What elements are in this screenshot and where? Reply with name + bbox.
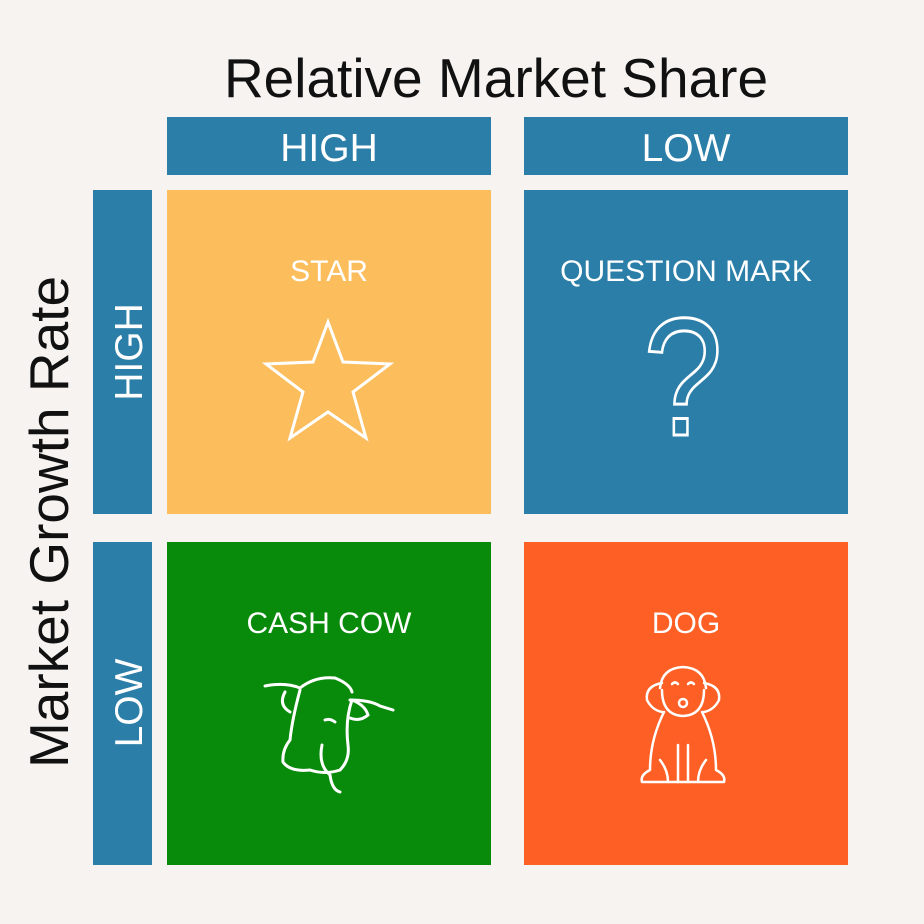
side label: HIGH: HIGH bbox=[108, 303, 151, 401]
title: Relative Market Share bbox=[224, 47, 768, 109]
icon: star bbox=[266, 322, 390, 438]
y-axis title: Market Growth Rate bbox=[18, 276, 80, 768]
side label: HIGH bbox=[93, 190, 152, 514]
panel: star bbox=[167, 190, 491, 514]
panel: question mark bbox=[524, 190, 848, 514]
panel: cash cow bbox=[167, 542, 491, 865]
side label: LOW: LOW bbox=[108, 658, 151, 747]
header: HIGH bbox=[167, 117, 491, 175]
header: LOW bbox=[524, 117, 848, 175]
panel: dog bbox=[524, 542, 848, 865]
header: LOW: LOW bbox=[642, 127, 731, 170]
icon: dog bbox=[642, 667, 724, 782]
header: HIGH: HIGH bbox=[280, 127, 378, 170]
icon: question mark: ? bbox=[643, 284, 723, 472]
side label: LOW bbox=[93, 542, 152, 865]
icon: cow bbox=[265, 678, 393, 792]
panel: question mark: QUESTION MARK bbox=[560, 255, 812, 288]
panel: star: STAR bbox=[290, 255, 368, 288]
panel: dog: DOG bbox=[652, 607, 720, 640]
panel: cash cow: CASH COW bbox=[246, 607, 412, 640]
